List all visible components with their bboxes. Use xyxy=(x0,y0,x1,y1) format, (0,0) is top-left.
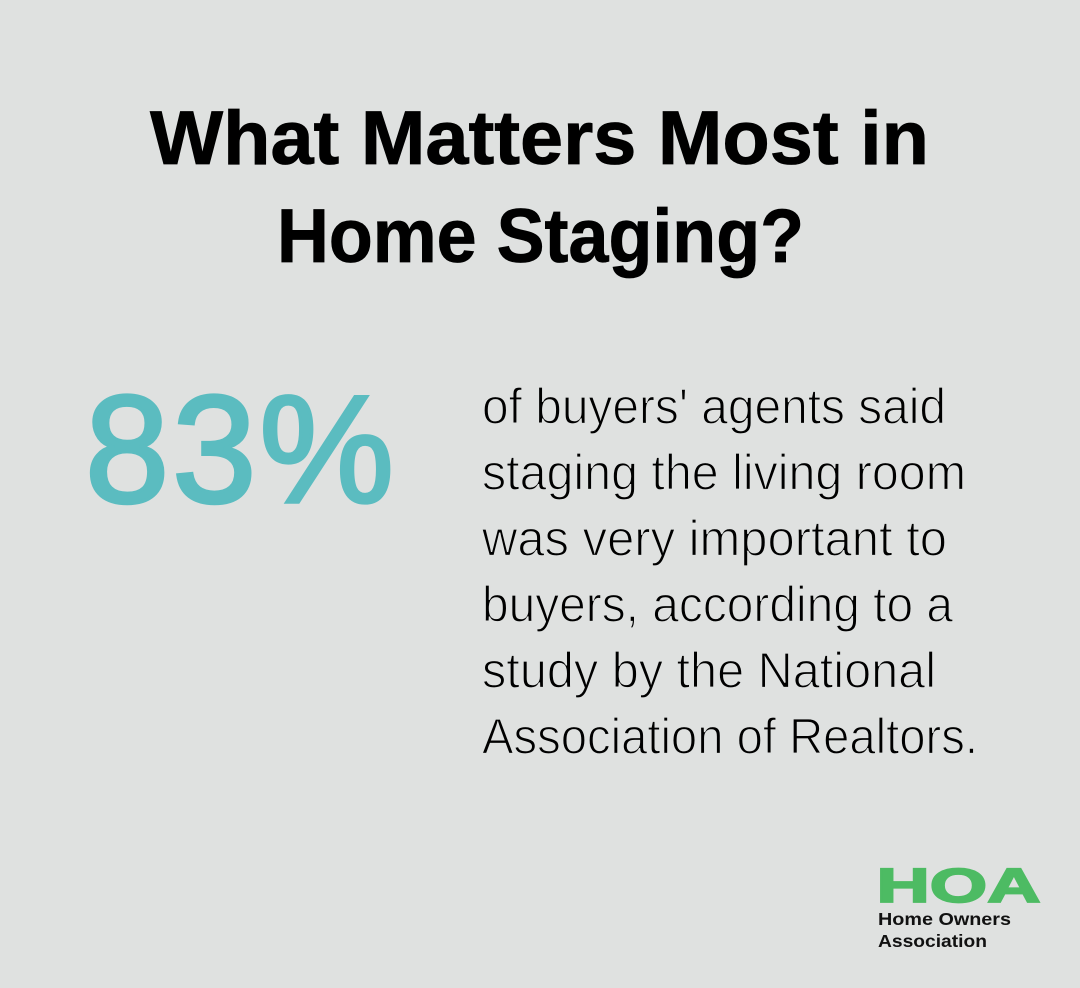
title xyxy=(150,96,929,279)
body text xyxy=(481,378,978,764)
title: What Matters Most in xyxy=(150,96,929,181)
logo tagline: Home Owners xyxy=(878,909,1011,929)
logo tagline xyxy=(878,909,1011,951)
body text: buyers, according to a xyxy=(482,576,953,632)
logo wordmark: HOA xyxy=(876,860,1040,913)
body text: study by the National xyxy=(482,642,936,698)
logo tagline: Association xyxy=(878,931,987,951)
body text: was very important to xyxy=(481,510,947,566)
body text: staging the living room xyxy=(482,444,966,500)
title: Home Staging? xyxy=(277,194,804,279)
logo: HOA Home Owners Association xyxy=(876,860,1040,951)
body text: of buyers' agents said xyxy=(482,378,946,434)
statistic: 83%: 83% xyxy=(85,364,397,535)
body text: Association of Realtors. xyxy=(482,708,978,764)
